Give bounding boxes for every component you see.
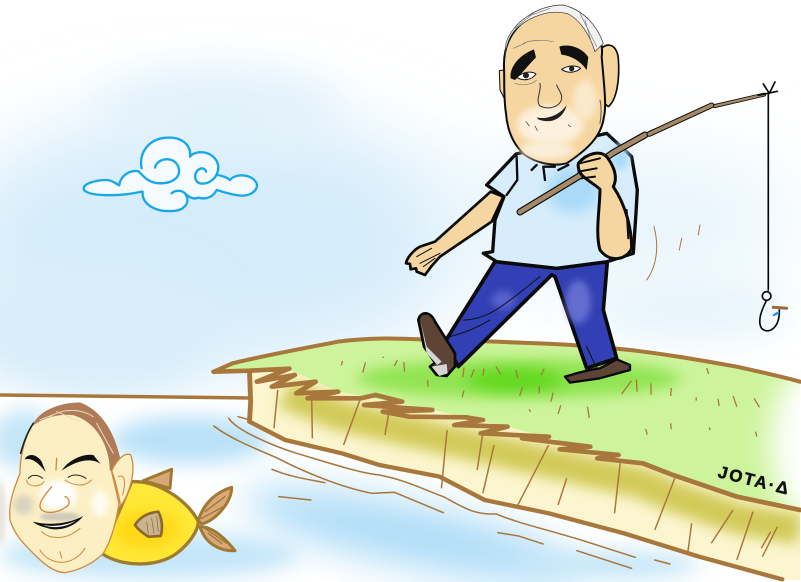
horizon line [0,395,252,398]
rear shoe [565,359,630,383]
dorsal fin [143,469,172,488]
fish body [102,482,198,564]
ear [112,454,133,506]
fishing rod [520,82,787,331]
tail fin [198,487,235,551]
smile [33,516,83,529]
cliff face [252,370,800,580]
hair [505,5,603,55]
cliff outline [214,338,800,579]
fish with man's face [0,403,235,573]
shirt [483,133,637,268]
walking man with fishing rod [406,5,787,383]
arm at front [406,192,503,275]
trousers [445,262,617,368]
water ripple lines [214,417,670,568]
side ear [499,70,506,102]
hair [33,403,122,471]
eyes [28,475,86,478]
eyebrows [25,455,101,472]
carrying arm and hand [578,153,632,259]
side fin [135,512,162,537]
signature: JOTA·Δ [716,462,792,499]
mouth [537,105,567,121]
nose [538,83,562,108]
beige left edge smudge [0,480,6,547]
ear [598,45,619,107]
cliff cracks [274,390,777,560]
eyebrows [511,45,588,80]
eyes and creases [517,66,581,80]
grass top [224,340,800,508]
head [504,5,605,165]
motion lines [647,225,700,280]
grass tufts [341,357,759,437]
cloud [84,138,257,211]
fishing line [766,93,771,290]
land: grassy cliff bank [210,330,801,580]
face [10,403,122,573]
water [0,397,700,582]
nose [40,458,69,512]
front shoe [418,313,455,376]
